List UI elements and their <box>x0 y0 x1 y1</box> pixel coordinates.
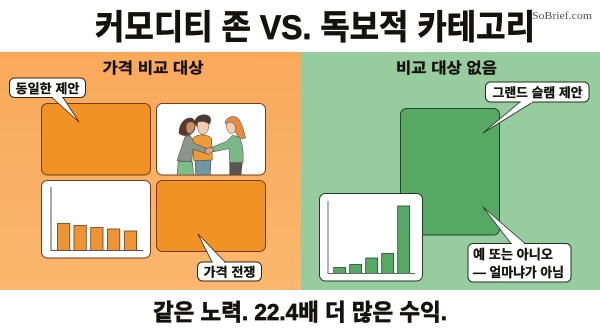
left woman jacket <box>177 135 209 162</box>
card: handshake people <box>156 104 266 175</box>
shaking hands <box>206 147 214 155</box>
title: 커모디티 존 VS. 독보적 카테고리 <box>95 9 535 47</box>
card: bar chart declining <box>42 180 150 258</box>
bars <box>334 206 410 274</box>
right woman face <box>226 122 236 133</box>
card: orange top left <box>42 104 150 175</box>
callout: price war: 가격 전쟁 <box>204 264 256 280</box>
callout: yes or no: — 얼마냐가 아님 <box>473 265 564 280</box>
footer statement: 같은 노력. 22.4배 더 많은 수익. <box>153 299 447 325</box>
callout: grand slam offer: 그랜드 슬램 제안 <box>492 85 583 100</box>
man sweater <box>192 135 212 161</box>
man trousers <box>195 159 211 175</box>
callout: same offer <box>10 78 86 122</box>
callout: yes or no: 예 또는 아니오 <box>473 247 553 262</box>
right woman hair <box>225 116 246 139</box>
panel: category of one <box>301 52 600 290</box>
callout: same offer: 동일한 제안 <box>16 81 80 96</box>
card: bar chart rising <box>320 194 422 281</box>
left woman skirt <box>177 161 194 175</box>
axes <box>328 201 415 274</box>
right woman top <box>210 135 243 163</box>
man hair <box>195 115 211 127</box>
man neck and face <box>197 120 209 134</box>
callout: grand slam offer <box>483 82 589 133</box>
left woman hair <box>179 118 195 136</box>
card: green large <box>400 108 500 235</box>
right woman trousers <box>230 162 242 175</box>
heading: no comparison: 비교 대상 없음 <box>396 60 497 77</box>
panel: commodity zone <box>0 52 301 290</box>
callout: yes or no <box>468 207 571 282</box>
axes <box>51 187 143 250</box>
callout: price war <box>198 234 262 281</box>
bars <box>58 224 137 250</box>
card: orange bottom right <box>156 180 266 252</box>
left woman face <box>186 122 195 134</box>
heading: comparison target: 가격 비교 대상 <box>102 60 204 77</box>
watermark: SoBrief.com <box>532 11 592 22</box>
